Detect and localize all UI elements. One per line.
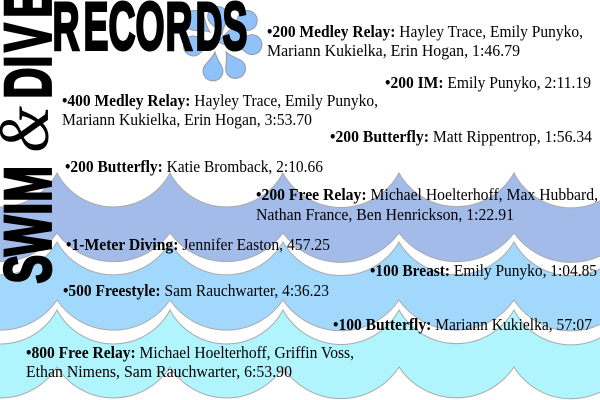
- record: 200 Butterfly, Katie Bromback: •200 Butterfly: Katie Bromback, 2:10.66: [65, 157, 323, 176]
- record: 400 Medley Relay: Mariann Kukielka, Erin Hogan, 3:53.70: [62, 110, 312, 129]
- record: 200 Butterfly, Matt Rippentrop: •200 Butterfly: Matt Rippentrop, 1:56.34: [330, 127, 592, 146]
- icon: water splash drops: [181, 4, 263, 82]
- record: 400 Medley Relay: •400 Medley Relay: Hayley Trace, Emily Punyko,: [62, 91, 378, 110]
- record: 200 Medley Relay: [267, 22, 583, 60]
- record: 200 Medley Relay: Mariann Kukielka, Erin Hogan, 1:46.79: [267, 41, 520, 60]
- record: 500 Freestyle: •500 Freestyle: Sam Rauchwarter, 4:36.23: [63, 281, 329, 300]
- wave band: dark periwinkle: [0, 173, 600, 262]
- wave band: pale aqua: [0, 310, 600, 399]
- record: 200 Free Relay: Nathan France, Ben Henrickson, 1:22.91: [256, 205, 514, 224]
- record: 1-Meter Diving: •1-Meter Diving: Jennifer Easton, 457.25: [66, 235, 330, 254]
- title: Swim & Dive (vertical): [0, 0, 65, 283]
- record: 200 Free Relay: •200 Free Relay: Michael Hoelterhoff, Max Hubbard,: [256, 185, 598, 204]
- record: 400 Medley Relay: [62, 91, 378, 129]
- record: 800 Free Relay: Ethan Nimens, Sam Rauchwarter, 6:53.90: [26, 362, 292, 381]
- record: 200 Medley Relay: •200 Medley Relay: Hayley Trace, Emily Punyko,: [267, 22, 583, 41]
- record: 200 Free Relay: [256, 185, 598, 224]
- record: 800 Free Relay: [26, 343, 354, 381]
- record: 100 Butterfly: •100 Butterfly: Mariann Kukielka, 57:07: [333, 315, 592, 334]
- wave band: sky blue: [0, 242, 600, 331]
- record: 800 Free Relay: •800 Free Relay: Michael Hoelterhoff, Griffin Voss,: [26, 343, 354, 362]
- record: 200 IM: •200 IM: Emily Punyko, 2:11.19: [385, 73, 591, 92]
